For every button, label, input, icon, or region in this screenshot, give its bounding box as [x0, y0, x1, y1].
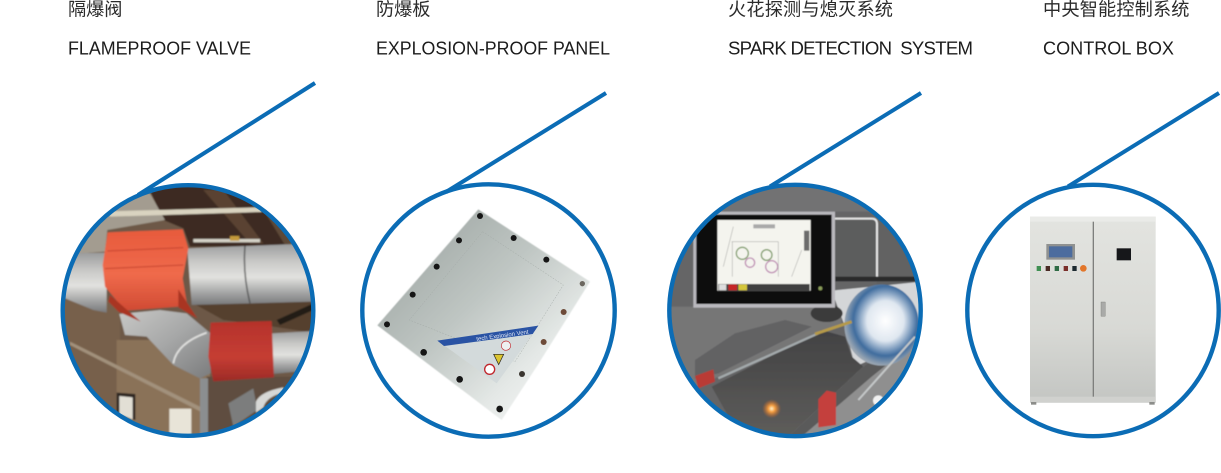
flash sphere — [844, 284, 919, 366]
cabinet body — [1030, 217, 1156, 403]
photo: vent panel — [377, 209, 590, 420]
control buttons — [1037, 265, 1087, 272]
duct: right silver pipe — [187, 243, 313, 305]
circle frame — [362, 184, 615, 437]
pipe band behind sphere — [832, 282, 922, 367]
duct: diagonal silver elbow — [119, 310, 211, 378]
panel: control box — [967, 0, 1219, 436]
duct: lower right pipe — [272, 331, 313, 374]
circle frame — [669, 185, 921, 436]
conveyor belt — [712, 330, 863, 440]
leader line — [770, 93, 921, 186]
photo: flameproof valves on ducting — [64, 187, 312, 434]
photo: control cabinet — [1030, 217, 1156, 405]
stripe text: tech Explosion Vent — [476, 330, 529, 343]
photo: spark detection scene — [672, 187, 918, 434]
leader line — [138, 83, 315, 195]
red sensor lower — [818, 391, 836, 427]
panel: flameproof valve — [60, 0, 316, 438]
heading: explosion panel english: EXPLOSION-PROOF PANEL — [376, 37, 610, 58]
sensor hose — [718, 333, 818, 378]
panel: explosion-proof panel — [362, 0, 615, 437]
panel: spark detection system — [655, 0, 973, 450]
plate bolts — [384, 213, 585, 412]
heading: explosion panel chinese: 防爆板 — [376, 0, 430, 20]
heading: flameproof valve english: FLAMEPROOF VALVE — [68, 37, 251, 58]
heading: spark detection chinese: 火花探测与熄灭系统 — [728, 0, 893, 20]
white fitting — [873, 395, 884, 406]
icon: warning triangle — [494, 354, 504, 365]
blue label stripe — [437, 326, 538, 346]
heading: flameproof valve chinese: 隔爆阀 — [68, 0, 122, 20]
black meter — [1117, 248, 1131, 260]
monitor — [693, 212, 835, 308]
leader line — [446, 93, 606, 192]
orange spark — [762, 399, 781, 418]
heading: control box chinese: 中央智能控制系统 — [1043, 0, 1190, 20]
circle frame — [967, 185, 1219, 436]
valve: small dark red housing — [208, 321, 274, 381]
heading: control box english: CONTROL BOX — [1043, 37, 1175, 58]
icon: prohibition sign — [485, 364, 495, 374]
duct: left silver pipe — [65, 253, 107, 313]
vent plate — [377, 209, 590, 420]
touch screen — [1046, 244, 1075, 260]
heading: spark detection english: SPARK DETECTION SYSTEM — [728, 37, 973, 58]
red sensor left — [695, 369, 715, 388]
warning label — [445, 334, 533, 383]
door handle — [1101, 302, 1105, 316]
valve: large orange red housing — [103, 229, 188, 311]
circle frame — [63, 185, 313, 436]
icon: mandatory sign — [501, 341, 511, 350]
leader line — [1068, 93, 1219, 186]
